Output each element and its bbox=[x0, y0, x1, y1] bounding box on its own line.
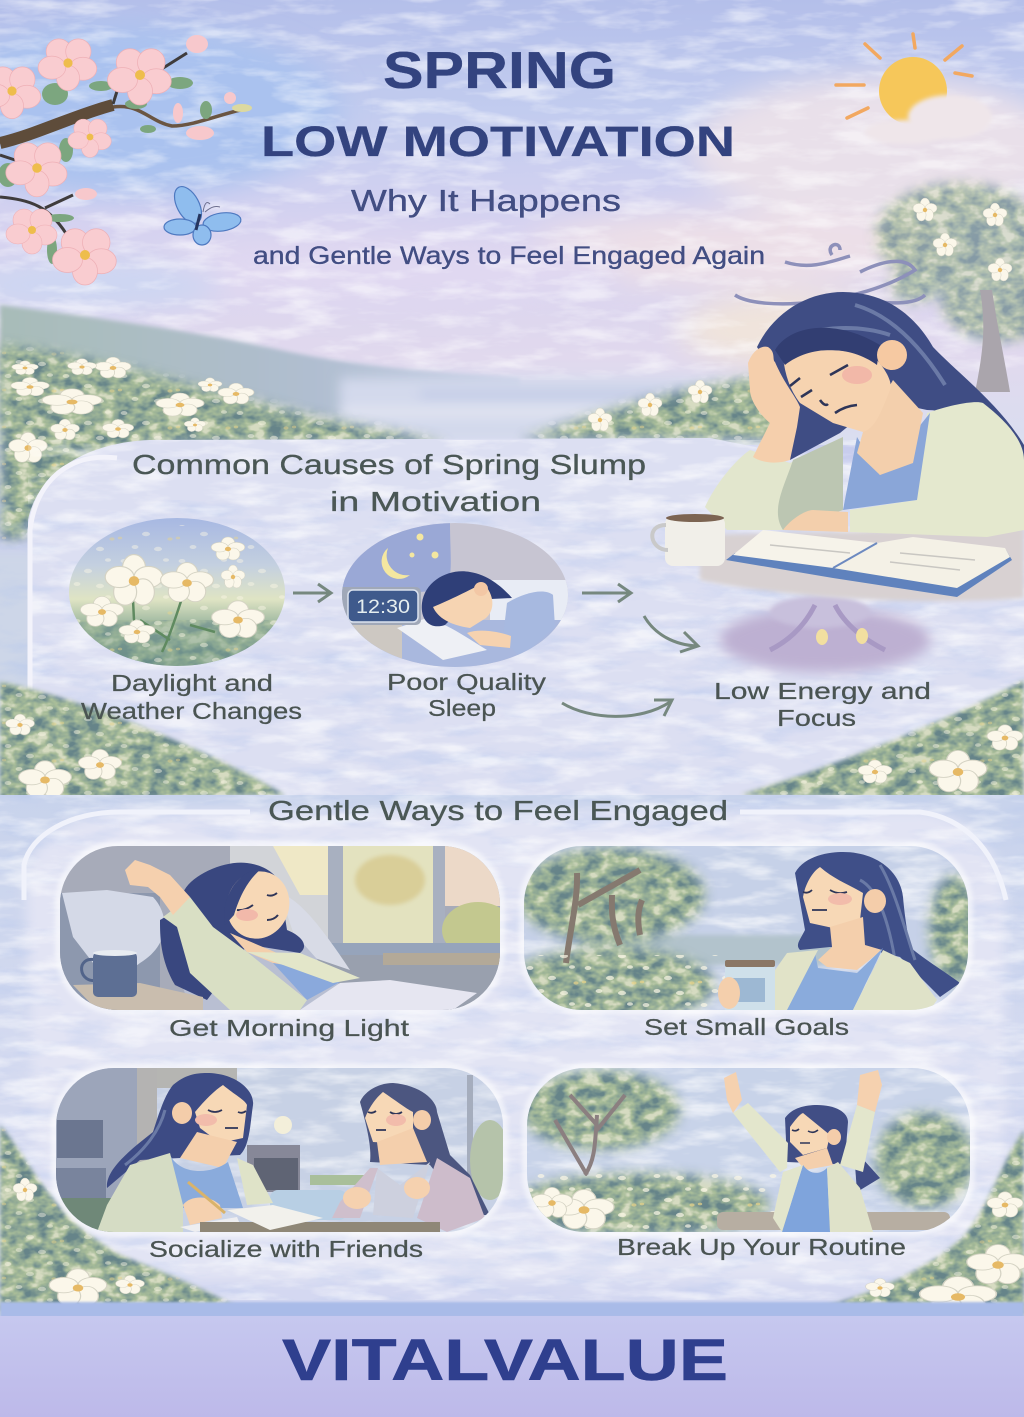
section background bbox=[0, 795, 1024, 1320]
section cloud highlights bbox=[0, 795, 1024, 1300]
cause 3: low energy icon bbox=[720, 596, 930, 672]
eyes and mouth bbox=[790, 365, 857, 413]
meadow right bbox=[521, 371, 770, 445]
blush bbox=[842, 366, 872, 384]
illustration: tired woman at desk bbox=[652, 292, 1024, 601]
sun bbox=[836, 34, 992, 144]
sweater shade bbox=[778, 437, 843, 530]
arrow 4 bbox=[562, 700, 672, 716]
sky cloud streaks bbox=[0, 0, 1024, 380]
sky background bbox=[0, 0, 1024, 445]
cause labels: Weather Changes bbox=[81, 698, 302, 724]
card glow bbox=[56, 1068, 503, 1232]
meadow lower corners bbox=[0, 1120, 1024, 1317]
water band bbox=[340, 378, 800, 440]
meadow flowers bbox=[9, 357, 712, 462]
arrow 3 bbox=[644, 616, 698, 652]
meadow lower flowers bbox=[13, 1178, 1024, 1316]
label: socialize and break: Socialize with Friends bbox=[149, 1236, 423, 1262]
heading: Gentle Ways to Feel Engaged bbox=[268, 795, 728, 826]
friends scene bbox=[56, 1068, 510, 1232]
cause labels bbox=[81, 669, 931, 731]
distant hills bbox=[0, 305, 520, 430]
hair sheen bbox=[790, 305, 945, 385]
card glow bbox=[527, 1068, 970, 1232]
label: morning and goals bbox=[169, 1014, 849, 1041]
face bbox=[783, 350, 891, 432]
panel cloud highlights bbox=[28, 440, 1024, 800]
left gutter wash bbox=[0, 548, 40, 808]
shirt bbox=[843, 413, 930, 510]
label: socialize and break bbox=[149, 1234, 906, 1262]
cause labels: Focus bbox=[777, 705, 856, 731]
panel background bbox=[28, 438, 1024, 800]
card: socialize bbox=[56, 1068, 510, 1232]
title block: and Gentle Ways to Feel Engaged Again bbox=[253, 242, 765, 270]
card: break routine bbox=[520, 1060, 980, 1235]
card: morning light bbox=[60, 846, 514, 1010]
open book bbox=[726, 530, 1012, 597]
card: small goals bbox=[520, 840, 980, 1015]
panel: gentle ways bbox=[0, 795, 1024, 1320]
sky colour washes bbox=[0, 25, 1024, 366]
breeze swirls bbox=[735, 245, 925, 304]
cause 2: poor sleep bbox=[333, 523, 568, 667]
card glow bbox=[60, 846, 500, 1010]
folded hand bbox=[783, 510, 848, 532]
butterfly bbox=[164, 182, 242, 245]
tree right bbox=[860, 170, 1024, 392]
hair bbox=[757, 292, 1024, 470]
panel: common causes bbox=[0, 438, 1024, 808]
label: socialize and break: Break Up Your Routine bbox=[617, 1234, 906, 1260]
section outline bbox=[24, 812, 1006, 900]
cause 2: poor sleep: 12:30 bbox=[356, 597, 410, 618]
title block bbox=[253, 42, 765, 270]
meadow left bbox=[0, 342, 444, 546]
ear bbox=[877, 340, 907, 370]
morning scene bbox=[60, 846, 514, 1010]
heading: Common Causes of Spring Slump bbox=[132, 449, 646, 480]
panel outline bbox=[30, 457, 117, 690]
table bbox=[700, 528, 1024, 601]
stretching scene bbox=[520, 1060, 980, 1235]
arrow 2 bbox=[582, 584, 631, 602]
cause labels: Poor Quality bbox=[387, 669, 547, 695]
card glow bbox=[524, 846, 968, 1010]
heading bbox=[132, 449, 646, 517]
title block: LOW MOTIVATION bbox=[261, 118, 735, 166]
panel cloud mottling bbox=[0, 500, 1024, 800]
heading: in Motivation bbox=[330, 486, 541, 517]
sweater right bbox=[850, 402, 1024, 537]
bushes bbox=[0, 675, 1024, 800]
bangs bbox=[775, 328, 880, 365]
cause 1: daylight and weather bbox=[69, 518, 285, 666]
bush flowers bbox=[6, 714, 1023, 798]
title block: Why It Happens bbox=[351, 183, 621, 218]
cause labels: Sleep bbox=[428, 695, 496, 721]
footer band bbox=[0, 1302, 1024, 1417]
cause labels: Low Energy and bbox=[714, 678, 931, 704]
title block: SPRING bbox=[383, 42, 616, 100]
arrow 1 bbox=[293, 584, 331, 602]
hand on head bbox=[748, 347, 800, 463]
goals scene bbox=[520, 840, 980, 1015]
coffee cup bbox=[652, 514, 725, 566]
cherry blossom branch bbox=[0, 35, 252, 285]
label: morning and goals: Set Small Goals bbox=[644, 1014, 849, 1040]
cause labels: Daylight and bbox=[111, 670, 273, 696]
section cloud mottling bbox=[0, 795, 1024, 1300]
neck bbox=[857, 380, 923, 475]
footer band: VITALVALUE bbox=[282, 1328, 728, 1393]
label: morning and goals: Get Morning Light bbox=[169, 1015, 410, 1041]
inner wash bbox=[25, 810, 1005, 1280]
sweater left bbox=[705, 437, 843, 530]
